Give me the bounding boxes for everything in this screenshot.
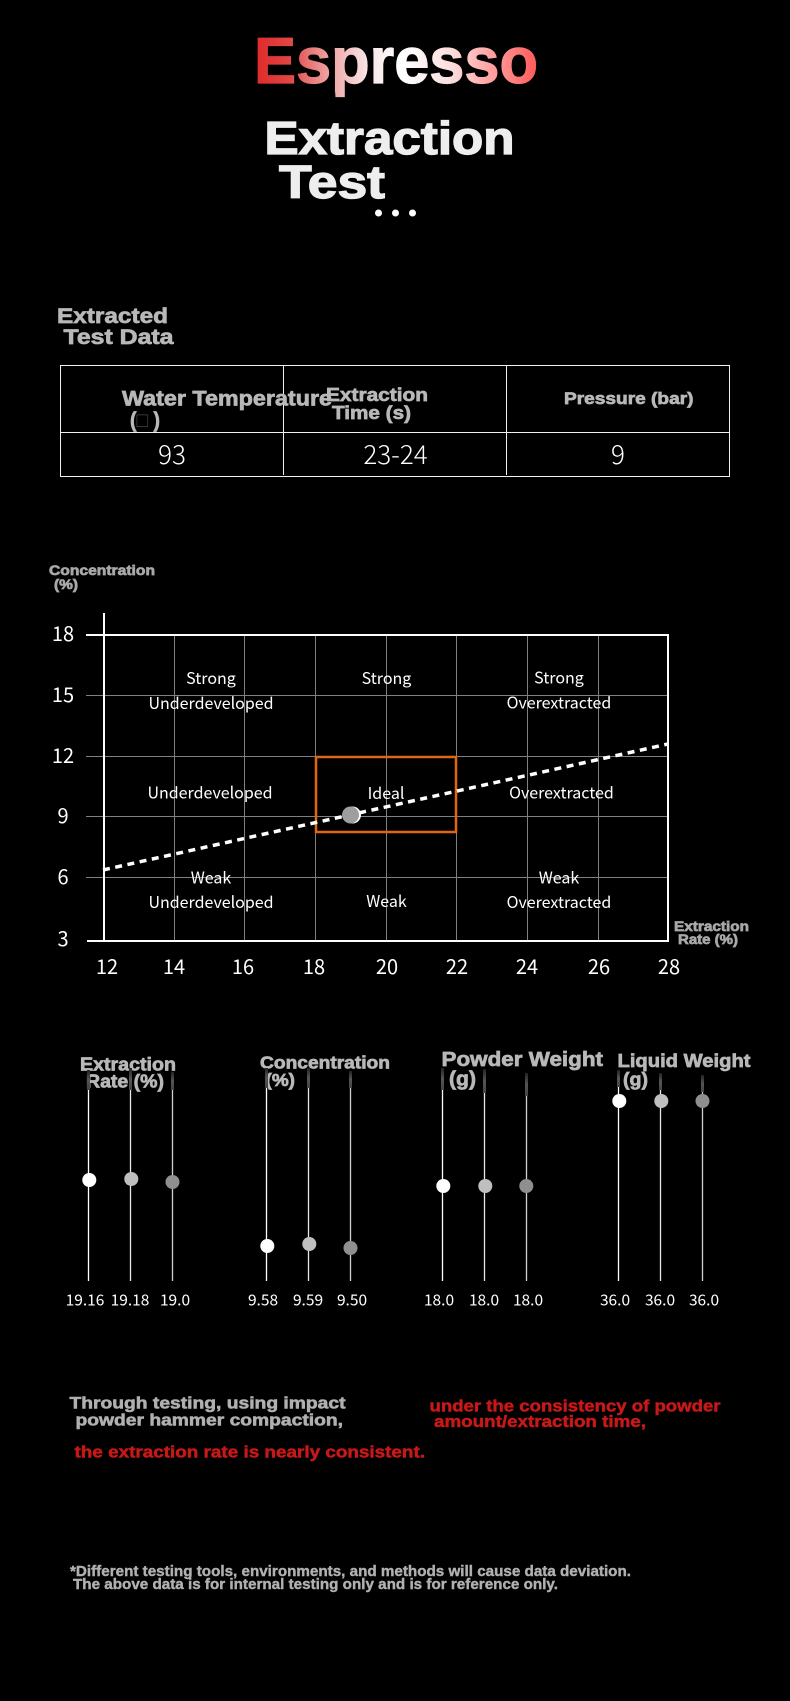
values: 19.16: [66, 1288, 104, 1310]
panel: extraction rate dots: [66, 1054, 190, 1310]
footnote: The above data is for internal testing only and is for reference only.: [73, 1577, 558, 1593]
values: 18.0: [469, 1288, 499, 1310]
y axis title: [49, 562, 155, 592]
x axis labels: 26: [588, 951, 610, 980]
y axis labels: 18: [52, 618, 74, 647]
values: 18.0: [513, 1288, 543, 1310]
zone labels: Overextracted: [507, 690, 611, 714]
y axis labels: 6: [57, 861, 69, 890]
table header: water temperature: (□ ): [130, 409, 160, 432]
icon: three dots: [375, 210, 416, 216]
zone labels: Strong: [186, 665, 236, 689]
heading: Extracted Test Data: Test Data: [64, 325, 175, 349]
chart axes and frame: [86, 613, 669, 942]
subtitle: Extraction Test: Extraction: [264, 112, 514, 164]
values: [66, 1288, 190, 1310]
values: 36.0: [689, 1288, 719, 1310]
y axis labels: 9: [57, 800, 69, 829]
data point: [342, 806, 361, 824]
panel: extraction chart: [49, 562, 749, 980]
table header: water temperature: Water Temperature: [122, 388, 332, 410]
subtitle: Extraction Test: Test: [279, 156, 385, 208]
zone labels: Underdeveloped: [147, 780, 273, 804]
stems: [265, 1068, 352, 1281]
values: 9.59: [293, 1288, 323, 1310]
values: 9.50: [337, 1288, 367, 1310]
heading: (g): [449, 1068, 476, 1090]
stems: [617, 1070, 704, 1281]
values: 36.0: [645, 1288, 675, 1310]
dots: [260, 1237, 358, 1255]
zone labels: Weak: [539, 864, 579, 888]
conclusion text: red condition: [430, 1396, 721, 1431]
values: [424, 1288, 543, 1310]
heading: Liquid Weight: [618, 1050, 750, 1071]
table header: extraction time: [326, 384, 428, 423]
values: 19.0: [160, 1288, 190, 1310]
y axis title: Concentration: [49, 562, 155, 578]
table values: 23-24: [363, 435, 428, 472]
heading: (g): [623, 1068, 648, 1090]
x axis labels: 14: [163, 951, 185, 980]
footnote: [70, 1564, 631, 1593]
values: [248, 1288, 367, 1310]
values: 18.0: [424, 1288, 454, 1310]
values: 36.0: [600, 1288, 630, 1310]
ideal zone: [316, 757, 456, 832]
values: 9.58: [248, 1288, 278, 1310]
x axis title: Extraction: [674, 918, 749, 934]
x axis labels: 24: [516, 951, 538, 980]
zone labels: Underdeveloped: [148, 889, 274, 913]
table grid: [60, 366, 730, 476]
subtitle: Extraction Test: [264, 112, 514, 208]
conclusion text: red result: the extraction rate is nearly consistent.: [74, 1442, 425, 1462]
zone labels: Underdeveloped: [148, 690, 274, 714]
heading: [442, 1049, 603, 1090]
panel: concentration dots: [248, 1052, 390, 1310]
dots: [612, 1094, 710, 1108]
x axis labels: 28: [658, 951, 680, 980]
x axis title: Rate (%): [678, 931, 738, 947]
heading: [260, 1052, 390, 1090]
x axis labels: [96, 951, 680, 980]
footnote: *Different testing tools, environments, and methods will cause data deviation.: [70, 1564, 631, 1580]
zone labels: Ideal: [368, 780, 404, 804]
heading: (%): [266, 1070, 295, 1090]
dots: [82, 1172, 180, 1189]
table header: water temperature: [122, 388, 332, 432]
zone labels: Overextracted: [507, 889, 611, 913]
heading: Concentration: [260, 1052, 390, 1072]
zone labels: Weak: [191, 864, 231, 888]
y axis labels: [52, 618, 74, 952]
heading: [80, 1054, 176, 1092]
zone labels: Overextracted: [509, 780, 614, 804]
panel: powder weight dots: [424, 1049, 603, 1310]
zone labels: [147, 664, 614, 913]
table values: 93: [158, 435, 186, 472]
stems: [441, 1068, 528, 1281]
chart grid: [86, 635, 668, 941]
values: [600, 1288, 719, 1310]
table header: pressure: Pressure (bar): [564, 390, 694, 408]
values: 19.18: [111, 1288, 149, 1310]
zone labels: Strong: [534, 664, 584, 688]
table values: 9: [611, 435, 625, 472]
conclusion text: gray: Through testing, using impact: [70, 1394, 346, 1412]
title: Espresso: Espresso: [254, 24, 538, 97]
heading: [618, 1050, 750, 1090]
x axis labels: 20: [376, 951, 398, 980]
conclusion text: gray: [70, 1394, 346, 1430]
zone labels: Weak: [366, 888, 407, 912]
y axis labels: 12: [52, 740, 74, 769]
heading: Powder Weight: [442, 1049, 603, 1071]
panel: liquid weight dots: [600, 1050, 750, 1310]
stems: [87, 1068, 174, 1281]
zone labels: Strong: [362, 665, 411, 689]
conclusion text: red condition: under the consistency of powder: [430, 1396, 721, 1416]
y axis title: (%): [54, 576, 78, 592]
heading: Rate (%): [86, 1072, 164, 1092]
x axis labels: 16: [232, 951, 254, 980]
conclusion text: gray: powder hammer compaction,: [76, 1410, 343, 1430]
conclusion text: red condition: amount/extraction time,: [434, 1412, 646, 1431]
panel: test data table: [60, 366, 730, 476]
table header: extraction time: Extraction: [326, 384, 428, 405]
dots: [436, 1179, 533, 1193]
x axis labels: 22: [446, 951, 468, 980]
x axis labels: 18: [303, 951, 325, 980]
table header: extraction time: Time (s): [332, 402, 411, 423]
y axis labels: 3: [57, 923, 69, 952]
heading: Extracted Test Data: Extracted: [57, 304, 168, 328]
table values: [158, 435, 625, 472]
heading: Extraction: [80, 1054, 176, 1074]
x axis title: [674, 918, 749, 947]
trend line: [103, 744, 668, 870]
y axis labels: 15: [52, 679, 74, 708]
heading: Extracted Test Data: [57, 304, 175, 349]
x axis labels: 12: [96, 951, 118, 980]
